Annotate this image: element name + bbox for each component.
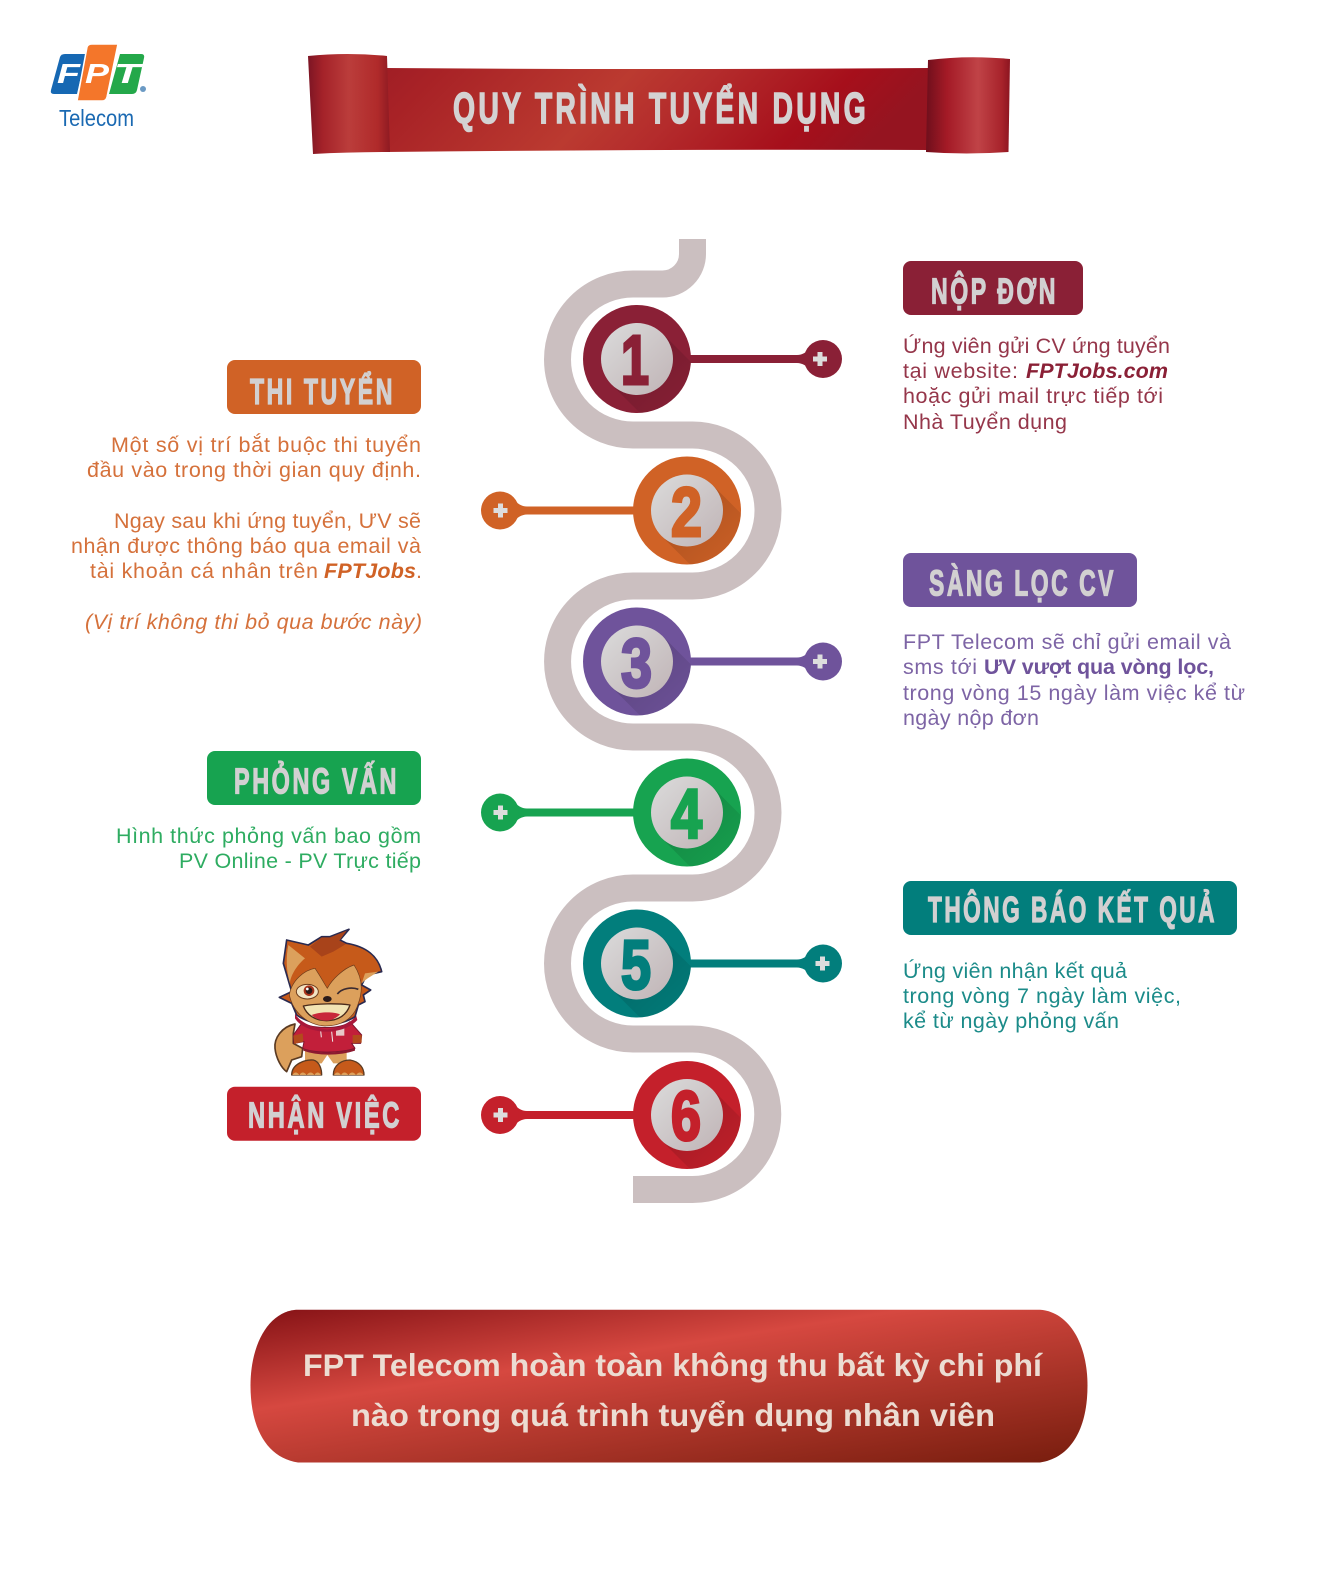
panel: nộp đơn — [903, 261, 1170, 434]
panel: thông báo kết quả: Ứng viên nhận kết quả — [903, 958, 1127, 983]
panel: thi tuyển: THI TUYỂN — [250, 370, 395, 412]
panel: sàng lọc cv: ƯV vượt qua vòng lọc, — [984, 655, 1214, 679]
callout: no fees — [250, 1310, 1088, 1462]
panel: nộp đơn: Ứng viên gửi CV ứng tuyển — [903, 333, 1170, 358]
step 2 node: 2 — [671, 473, 702, 551]
step 3 node — [583, 608, 842, 716]
step 6 node — [481, 1061, 741, 1169]
panel: thi tuyển: FPTJobs — [324, 559, 416, 583]
panel: sàng lọc cv: FPT Telecom sẽ chỉ gửi email và — [903, 630, 1231, 654]
title ribbon — [308, 54, 1010, 154]
callout: no fees: FPT Telecom hoàn toàn không thu bất kỳ chi phí — [303, 1347, 1043, 1383]
panel: nộp đơn: tại website: — [903, 359, 1018, 383]
panel: thông báo kết quả: kể từ ngày phỏng vấn — [903, 1009, 1119, 1033]
step 1 node — [583, 305, 842, 413]
panel: sàng lọc cv — [903, 553, 1245, 730]
step 2 node — [481, 456, 741, 564]
panel: thông báo kết quả — [903, 881, 1237, 1033]
panel: sàng lọc cv: trong vòng 15 ngày làm việc kể từ — [903, 681, 1245, 705]
panel: sàng lọc cv: sms tới — [903, 655, 977, 679]
callout: no fees: nào trong quá trình tuyển dụng nhân viên — [351, 1397, 995, 1433]
step 3 node: 3 — [621, 624, 652, 702]
panel: nộp đơn: Nhà Tuyển dụng — [903, 410, 1067, 434]
logo: FPT Telecom: P — [85, 58, 109, 89]
step 5 node — [583, 910, 842, 1018]
logo: FPT Telecom: T — [114, 58, 144, 89]
panel: nộp đơn: FPTJobs.com — [1026, 359, 1168, 383]
panel: thi tuyển: Một số vị trí bắt buộc thi tuyển — [111, 432, 421, 457]
serpentine path — [558, 239, 768, 1190]
panel: phỏng vấn — [116, 751, 421, 873]
panel: phỏng vấn: Hình thức phỏng vấn bao gồm — [116, 824, 421, 848]
step 1 node: 1 — [621, 321, 649, 399]
panel: nhận việc: NHẬN VIỆC — [248, 1094, 402, 1136]
logo: FPT Telecom: Telecom — [59, 105, 134, 131]
step 4 node — [481, 758, 741, 866]
mascot: fox — [275, 929, 382, 1075]
step 6 node: 6 — [671, 1077, 701, 1155]
panel: thi tuyển: Ngay sau khi ứng tuyển, ƯV sẽ — [114, 509, 421, 533]
panel: nhận việc — [227, 1087, 421, 1141]
step 4 node: 4 — [671, 775, 702, 853]
panel: nộp đơn: hoặc gửi mail trực tiếp tới — [903, 384, 1163, 408]
panel: phỏng vấn: PV Online - PV Trực tiếp — [179, 849, 421, 873]
panel: sàng lọc cv: SÀNG LỌC CV — [929, 562, 1116, 604]
panel: thi tuyển: nhận được thông báo qua email và — [71, 534, 421, 558]
title: QUY TRÌNH TUYỂN DỤNG — [453, 82, 869, 133]
panel: thi tuyển: . — [416, 559, 422, 583]
panel: phỏng vấn: PHỎNG VẤN — [234, 760, 399, 802]
logo: FPT Telecom — [51, 44, 146, 131]
panel: thông báo kết quả: trong vòng 7 ngày làm việc, — [903, 984, 1181, 1008]
panel: thi tuyển: đầu vào trong thời gian quy định. — [87, 458, 421, 482]
panel: thi tuyển — [71, 360, 422, 634]
logo: FPT Telecom: F — [57, 58, 81, 89]
step 5 node: 5 — [621, 926, 651, 1004]
panel: sàng lọc cv: ngày nộp đơn — [903, 706, 1039, 730]
panel: nộp đơn: NỘP ĐƠN — [931, 270, 1058, 312]
panel: thi tuyển: (Vị trí không thi bỏ qua bước này) — [85, 610, 422, 634]
panel: thi tuyển: tài khoản cá nhân trên — [90, 559, 318, 583]
